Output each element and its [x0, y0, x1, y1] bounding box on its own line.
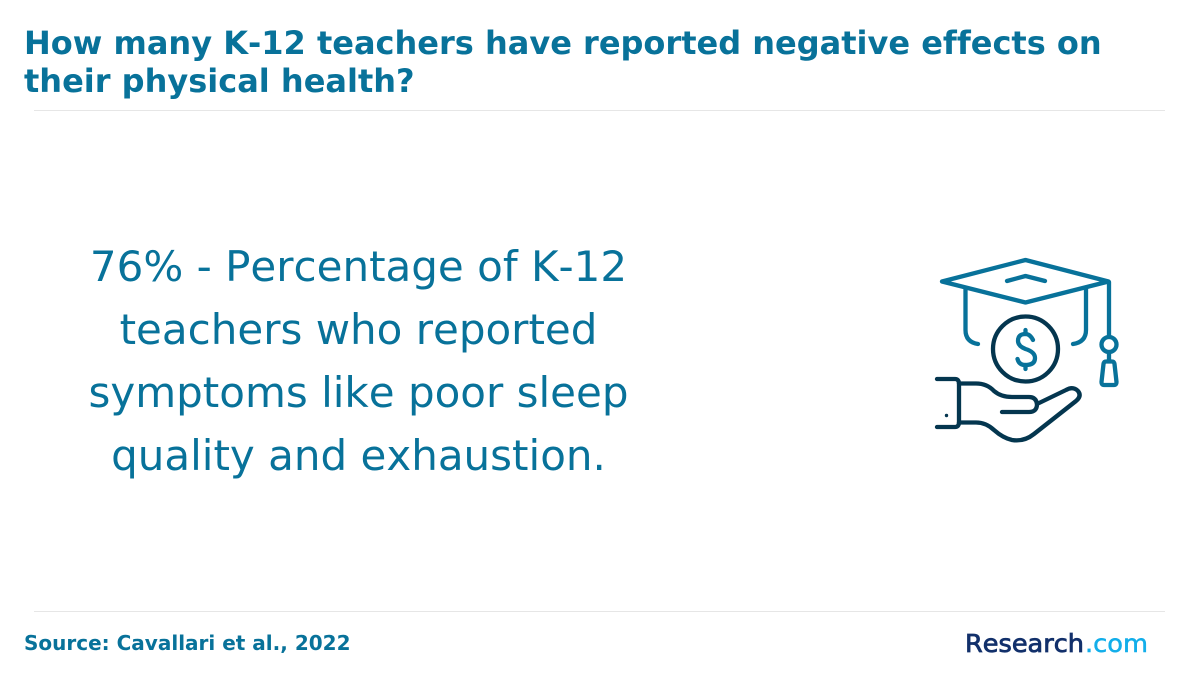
statistic text: symptoms like poor sleep [88, 368, 629, 417]
title [24, 24, 1102, 100]
title: How many K-12 teachers have reported negative effects on [24, 24, 1102, 62]
statistic text: teachers who reported [120, 305, 597, 354]
statistic text: quality and exhaustion. [111, 431, 606, 480]
statistic text: 76% - Percentage of K-12 [90, 242, 627, 291]
logo: Research [965, 629, 1084, 658]
icon: graduation cap, dollar coin and hand [934, 258, 1119, 442]
statistic text [88, 242, 629, 480]
title: their physical health? [24, 62, 415, 100]
logo [965, 629, 1148, 658]
logo: .com [1085, 629, 1148, 658]
source: Source: Cavallari et al., 2022 [24, 631, 350, 655]
